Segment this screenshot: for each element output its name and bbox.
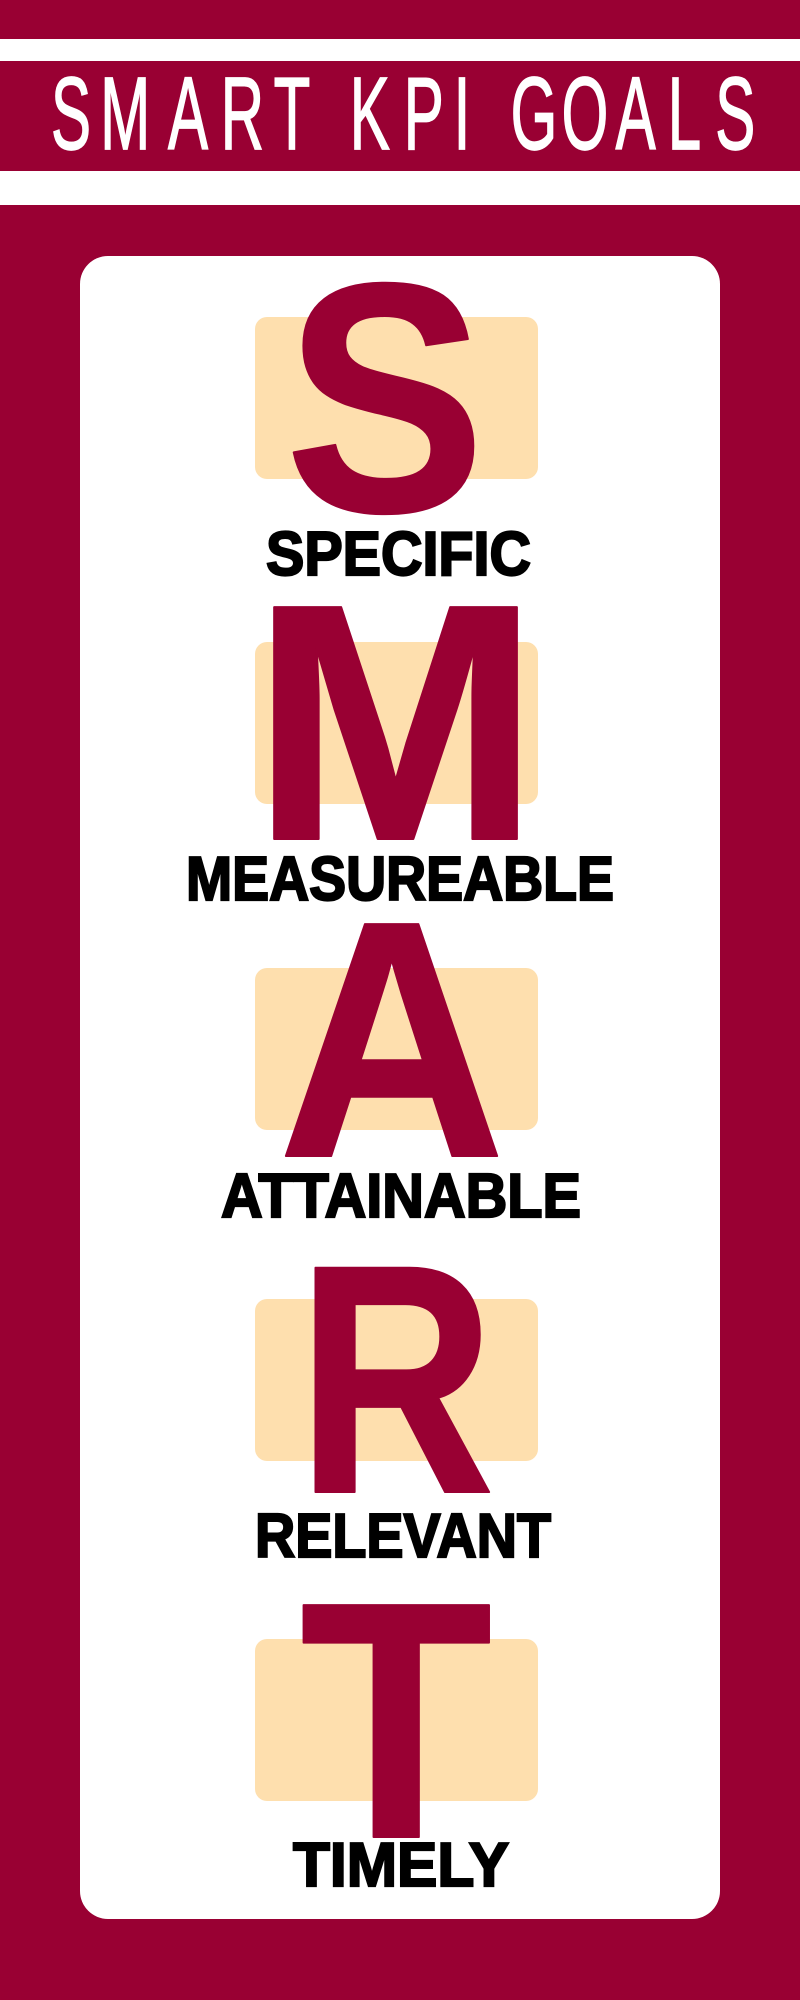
item: S Specific — [255, 216, 538, 589]
label Relevant: RELEVANT — [255, 1502, 551, 1571]
item: A Attainable — [221, 852, 581, 1231]
big letter T: T — [300, 1533, 492, 1909]
peach backing R — [255, 1299, 538, 1461]
item: T Timely — [255, 1533, 538, 1909]
big letter R: R — [297, 1196, 495, 1561]
top white stripe — [0, 39, 800, 61]
peach backing A — [255, 968, 538, 1130]
label Specific: SPECIFIC — [266, 520, 531, 589]
big letter A: A — [278, 852, 505, 1228]
label Attainable: ATTAINABLE — [221, 1162, 581, 1231]
peach backing M — [255, 642, 538, 804]
lower white stripe — [0, 171, 800, 205]
big letter M: M — [251, 535, 540, 911]
peach backing S — [255, 317, 538, 479]
panel: white card — [80, 216, 720, 1919]
title: SMART KPI GOALS — [51, 56, 755, 171]
big letter S: S — [285, 216, 485, 581]
label Timely: TIMELY — [293, 1831, 509, 1900]
item: M Measureable — [186, 535, 614, 914]
label Measureable: MEASUREABLE — [186, 845, 614, 914]
item: R Relevant — [255, 1196, 551, 1571]
peach backing T — [255, 1639, 538, 1801]
